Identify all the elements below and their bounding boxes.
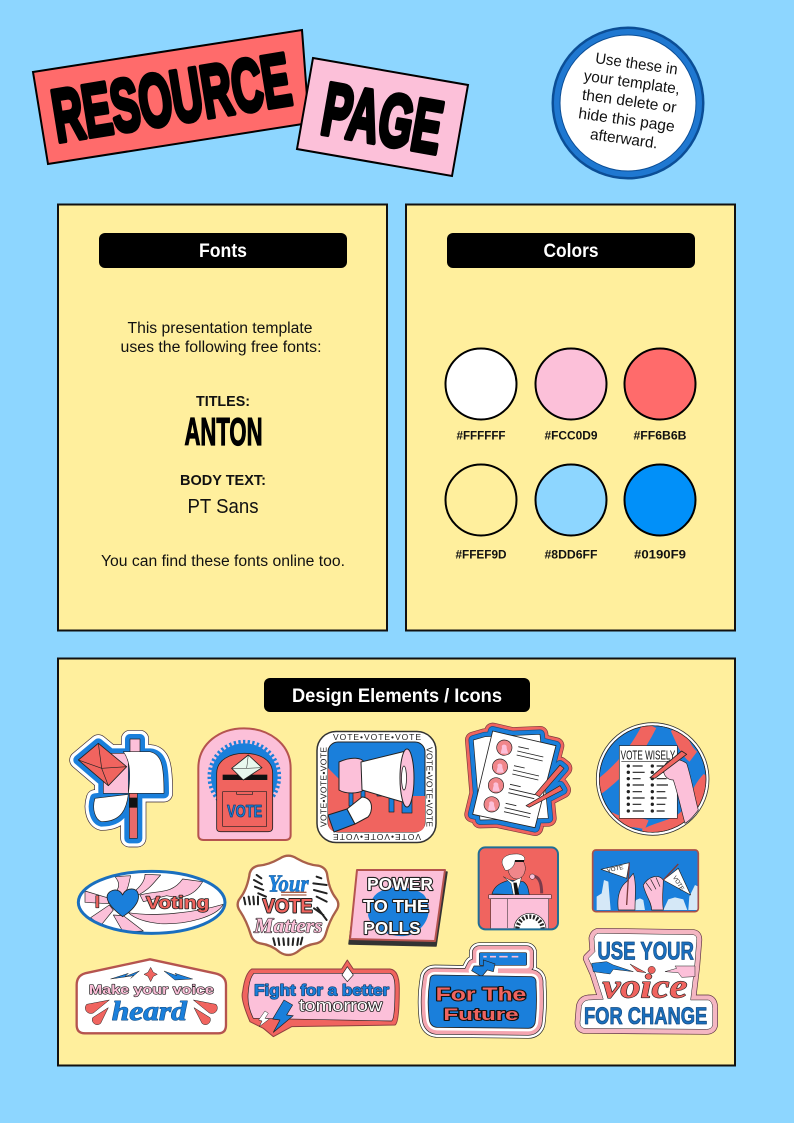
icon: ballot box sticker — [198, 728, 291, 840]
text: body font: BODY TEXT: — [180, 472, 266, 489]
icon: your vote matters sticker: VOTE — [263, 896, 313, 917]
icon: power to the polls sticker: POWER — [367, 874, 433, 894]
icon: make your voice heard sticker: heard — [112, 996, 187, 1026]
icon: your vote matters sticker — [238, 856, 338, 955]
icon: megaphone sticker: VOTE•VOTE•VOTE — [318, 747, 328, 827]
icon: i love voting sticker: Voting — [146, 892, 209, 912]
icon: ballot box sticker: VOTE — [227, 801, 262, 821]
icon: candidate papers sticker — [473, 731, 564, 828]
icon: your vote matters sticker: Matters — [253, 915, 322, 937]
title tag: page — [297, 58, 468, 176]
heading: design elements — [264, 678, 530, 712]
icon: megaphone sticker — [317, 732, 436, 842]
callout: usage note badge: Use these in — [594, 50, 679, 78]
icon: fight for a better tomorrow sticker: Fight for a better — [254, 983, 389, 1000]
swatch: light blue — [536, 464, 606, 562]
heading: colors: Colors — [544, 241, 598, 262]
swatch: white: #FFFFFF — [456, 428, 506, 442]
callout: usage note badge: hide this page — [577, 105, 676, 136]
panel: colors — [406, 204, 735, 630]
heading: fonts: Fonts — [199, 241, 247, 262]
icon: fight for a better tomorrow sticker: tomorrow — [299, 996, 383, 1015]
icon: use your voice for change sticker — [580, 933, 713, 1030]
text: intro: This presentation template — [128, 320, 312, 337]
panel: design elements — [58, 658, 735, 1066]
icon: speaker at podium sticker — [478, 846, 559, 930]
callout: usage note badge: then delete or — [581, 87, 677, 117]
heading: design elements: Design Elements / Icons — [292, 686, 502, 707]
icon: power to the polls sticker: TO THE — [363, 896, 429, 916]
icon: i love voting sticker: I — [95, 893, 100, 912]
icon: raised flags sticker — [593, 850, 698, 912]
swatch: pink — [536, 348, 606, 442]
heading: colors — [447, 233, 695, 268]
icon: mailbox sticker — [78, 739, 164, 838]
icon: megaphone sticker: VOTE•VOTE•VOTE — [424, 747, 434, 827]
icon: vote wisely sticker: VOTE WISELY — [621, 748, 676, 762]
text: body font — [180, 472, 266, 518]
icon: make your voice heard sticker — [77, 959, 226, 1033]
icon: use your voice for change sticker: FOR CHANGE — [584, 1003, 707, 1030]
swatch: red: #FF6B6B — [634, 428, 687, 442]
swatch: light blue: #8DD6FF — [544, 548, 598, 562]
icon: megaphone sticker: VOTE•VOTE•VOTE — [333, 832, 421, 842]
swatch: red — [624, 348, 696, 442]
icon: use your voice for change sticker: voice — [602, 968, 688, 1005]
text: titles font: TITLES: — [196, 393, 250, 410]
icon: for the future sticker — [428, 953, 536, 1028]
icon: for the future sticker: Future — [443, 1005, 519, 1024]
swatch: white — [446, 348, 516, 442]
icon: raised flags sticker: VOTE — [671, 875, 685, 892]
icon: raised flags sticker: VOTE — [606, 865, 624, 874]
panel: fonts — [58, 204, 387, 630]
title: resource page — [33, 30, 468, 176]
text: footer note: You can find these fonts online too. — [101, 553, 345, 570]
title tag: resource: RESOURCE — [46, 37, 296, 158]
swatch: yellow — [446, 464, 516, 562]
callout: usage note badge: afterward. — [589, 126, 659, 152]
title tag: resource — [33, 30, 309, 164]
callout: usage note badge — [552, 26, 704, 180]
callout: usage note badge: your template, — [583, 68, 681, 98]
icon: for the future sticker: For The — [436, 984, 526, 1005]
icon: make your voice heard sticker: Make your voice — [89, 982, 214, 997]
icon: megaphone sticker: VOTE•VOTE•VOTE — [333, 732, 421, 742]
icon: your vote matters sticker: Your — [268, 872, 309, 898]
text: intro: uses the following free fonts: — [120, 339, 322, 356]
icon: power to the polls sticker — [349, 870, 447, 946]
title tag: page: PAGE — [316, 67, 449, 170]
icon: power to the polls sticker: POLLS — [364, 918, 420, 938]
heading: fonts — [99, 233, 347, 268]
text: intro — [120, 320, 322, 356]
text: body font: PT Sans — [188, 496, 258, 518]
icon: fight for a better tomorrow sticker — [242, 960, 399, 1037]
swatch: pink: #FCC0D9 — [544, 428, 598, 442]
text: titles font — [184, 393, 262, 454]
icon: use your voice for change sticker: USE YOUR — [597, 937, 694, 965]
swatch: blue: #0190F9 — [634, 548, 686, 562]
swatch: yellow: #FFEF9D — [456, 548, 507, 562]
text: titles font: ANTON — [184, 411, 262, 454]
swatch: blue — [624, 464, 696, 562]
icon: vote wisely sticker — [595, 723, 709, 835]
icon: i love voting sticker — [78, 871, 225, 933]
